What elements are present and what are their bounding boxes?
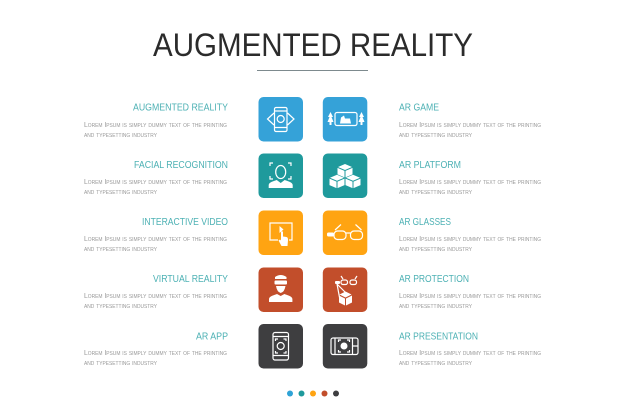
right item: ar glasses bbox=[399, 217, 541, 253]
left item: interactive video: Lorem Ipsum is simply dummy text of the printing bbox=[84, 236, 227, 243]
right item: ar presentation: Lorem Ipsum is simply dummy text of the printing bbox=[399, 350, 541, 357]
icon tile: ar platform cubes bbox=[323, 154, 367, 198]
left item: ar app: AR APP bbox=[196, 332, 228, 342]
right item: ar platform: AR PLATFORM bbox=[399, 160, 461, 171]
right item: ar protection bbox=[399, 274, 541, 310]
right item: ar protection: AR PROTECTION bbox=[399, 274, 469, 285]
icon tile: interactive video bbox=[258, 210, 303, 255]
icon tile: virtual reality headset person bbox=[258, 268, 303, 312]
right item: ar platform: and typesetting industry bbox=[399, 189, 473, 196]
left item: augmented reality: Lorem Ipsum is simply dummy text of the printing bbox=[84, 122, 227, 129]
left item: ar app: and typesetting industry bbox=[84, 360, 158, 367]
right item: ar presentation: AR PRESENTATION bbox=[399, 332, 478, 342]
right item: ar presentation bbox=[399, 332, 541, 367]
left item: facial recognition: Lorem Ipsum is simply dummy text of the printing bbox=[84, 179, 227, 186]
right item: ar platform bbox=[399, 160, 541, 196]
icon tile: ar protection bbox=[323, 268, 367, 312]
left item: virtual reality bbox=[84, 274, 228, 310]
right item: ar game: and typesetting industry bbox=[399, 132, 473, 139]
left item: augmented reality: AUGMENTED REALITY bbox=[133, 102, 228, 114]
icon tile: ar glasses bbox=[323, 210, 367, 255]
left item: virtual reality: Lorem Ipsum is simply dummy text of the printing bbox=[84, 293, 227, 300]
left item: facial recognition: and typesetting industry bbox=[84, 189, 158, 196]
left item: facial recognition: FACIAL RECOGNITION bbox=[134, 160, 228, 171]
left item: ar app bbox=[84, 332, 228, 367]
right item: ar game: AR GAME bbox=[399, 102, 439, 114]
icon tile: ar presentation tablet bbox=[323, 324, 367, 368]
right item: ar platform: Lorem Ipsum is simply dummy text of the printing bbox=[399, 179, 541, 186]
right item: ar glasses: AR GLASSES bbox=[399, 217, 451, 228]
title: AUGMENTED REALITY bbox=[153, 27, 473, 63]
icon tile: ar game console bbox=[323, 97, 367, 142]
icon tile: facial recognition bbox=[258, 154, 303, 198]
right item: ar game: Lorem Ipsum is simply dummy text of the printing bbox=[399, 122, 541, 129]
left item: virtual reality: VIRTUAL REALITY bbox=[153, 274, 228, 285]
icon tile: augmented reality phone bbox=[258, 97, 303, 142]
right item: ar glasses: and typesetting industry bbox=[399, 246, 473, 253]
icon tile: ar app phone bbox=[258, 324, 303, 368]
left item: virtual reality: and typesetting industry bbox=[84, 303, 158, 310]
right item: ar game bbox=[399, 102, 541, 139]
left item: augmented reality bbox=[84, 102, 228, 139]
left item: interactive video: and typesetting industry bbox=[84, 246, 158, 253]
left item: interactive video: INTERACTIVE VIDEO bbox=[142, 217, 228, 228]
left item: ar app: Lorem Ipsum is simply dummy text of the printing bbox=[84, 350, 227, 357]
left item: facial recognition bbox=[84, 160, 228, 196]
right item: ar protection: and typesetting industry bbox=[399, 303, 473, 310]
pagination dots bbox=[287, 390, 339, 396]
right item: ar glasses: Lorem Ipsum is simply dummy text of the printing bbox=[399, 236, 541, 243]
left item: augmented reality: and typesetting industry bbox=[84, 132, 158, 139]
right item: ar presentation: and typesetting industry bbox=[399, 360, 473, 367]
left item: interactive video bbox=[84, 217, 228, 253]
right item: ar protection: Lorem Ipsum is simply dummy text of the printing bbox=[399, 293, 541, 300]
title underline bbox=[257, 70, 368, 71]
